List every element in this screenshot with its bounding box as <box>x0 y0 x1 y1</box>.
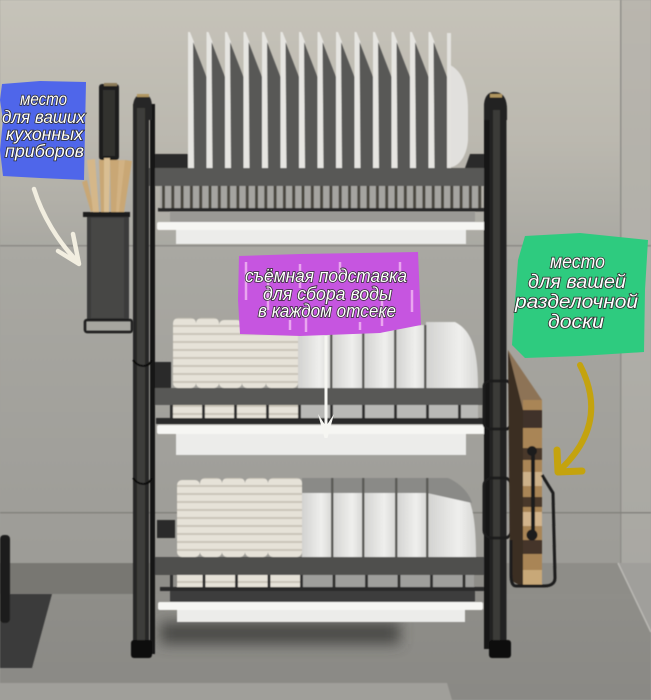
callout text: для вашей <box>528 271 626 293</box>
top tier: white drip tray <box>157 222 485 244</box>
callout text: для сбора воды <box>263 283 392 304</box>
utensil holder <box>82 83 132 332</box>
callout: cutting board (green) <box>512 233 648 358</box>
wooden sticks <box>82 158 132 212</box>
callout text: для ваших <box>2 107 86 127</box>
callout text: доски <box>548 311 604 333</box>
middle tier: basket and tray <box>150 362 492 455</box>
callout: drip tray (purple) <box>238 252 421 336</box>
callout text: приборов <box>5 141 84 161</box>
cutting board <box>508 350 555 587</box>
callout text: разделочной <box>514 291 638 313</box>
callout text: съёмная подставка <box>245 265 407 286</box>
yellow arrow to cutting board <box>557 365 591 472</box>
holder body <box>87 212 129 320</box>
white arrow to utensil holder <box>34 189 79 264</box>
bottom tier: basket and tray <box>150 557 491 622</box>
callout text: в каждом отсеке <box>258 300 396 321</box>
white arrow to drip tray <box>318 336 334 438</box>
icon: pot and black stove corner <box>0 535 52 668</box>
bottom tier: bowls <box>157 478 476 589</box>
holder loop <box>511 475 555 586</box>
middle tier: bowls <box>173 318 478 420</box>
callout text: место <box>20 89 67 109</box>
top tier: basket with tines <box>148 154 493 222</box>
right frame post <box>484 92 512 658</box>
callout: utensils (blue) <box>0 81 86 180</box>
dish rack <box>131 32 512 658</box>
strap with knobs <box>526 446 538 540</box>
callout text: кухонных <box>6 124 84 144</box>
shadow under the rack <box>160 622 400 644</box>
callout text: место <box>550 251 605 273</box>
knife slot <box>99 83 119 160</box>
left frame post <box>131 94 155 658</box>
top tier: plates <box>188 32 468 168</box>
